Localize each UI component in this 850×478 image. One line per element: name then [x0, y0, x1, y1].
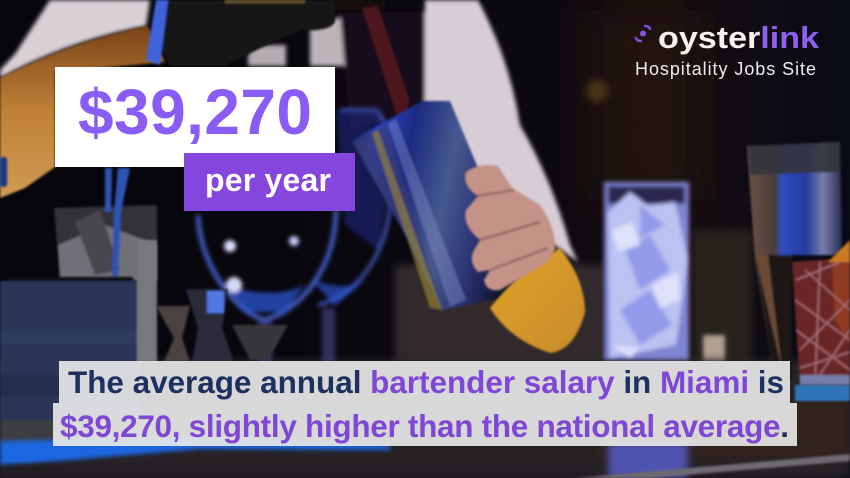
cocktail shaker — [352, 101, 528, 310]
bokeh background glow — [395, 10, 752, 365]
left tumbler — [54, 168, 157, 281]
bar counter — [0, 360, 850, 478]
shirt and vest — [0, 0, 578, 262]
bottle and gloved hand — [146, 0, 385, 66]
wine pour — [362, 6, 409, 120]
per year purple tag — [184, 153, 355, 211]
hand — [465, 165, 555, 290]
jiggers — [156, 289, 288, 362]
per year label: per year — [205, 162, 331, 198]
ice glass — [604, 182, 689, 360]
wine glasses — [198, 110, 392, 363]
left arm — [0, 26, 165, 198]
caption — [53, 361, 797, 446]
caption line 1: The average annual bartender salary in Miami is — [68, 364, 784, 400]
tall shaker glass — [747, 142, 842, 380]
cocktail tumbler — [792, 240, 850, 385]
logo tagline: Hospitality Jobs Site — [635, 59, 816, 79]
caption line 2: $39,270, slightly higher than the national average. — [60, 408, 789, 444]
salary white box — [55, 67, 335, 167]
logo — [635, 20, 820, 79]
lemon — [490, 248, 585, 353]
salary callout — [55, 67, 355, 211]
caption background strips — [53, 361, 797, 446]
icon: oyster signal — [636, 26, 650, 41]
logo wordmark: oyster link — [658, 20, 820, 55]
salary figure: $39,270 — [78, 76, 312, 148]
dark blue napkin block — [0, 240, 157, 420]
